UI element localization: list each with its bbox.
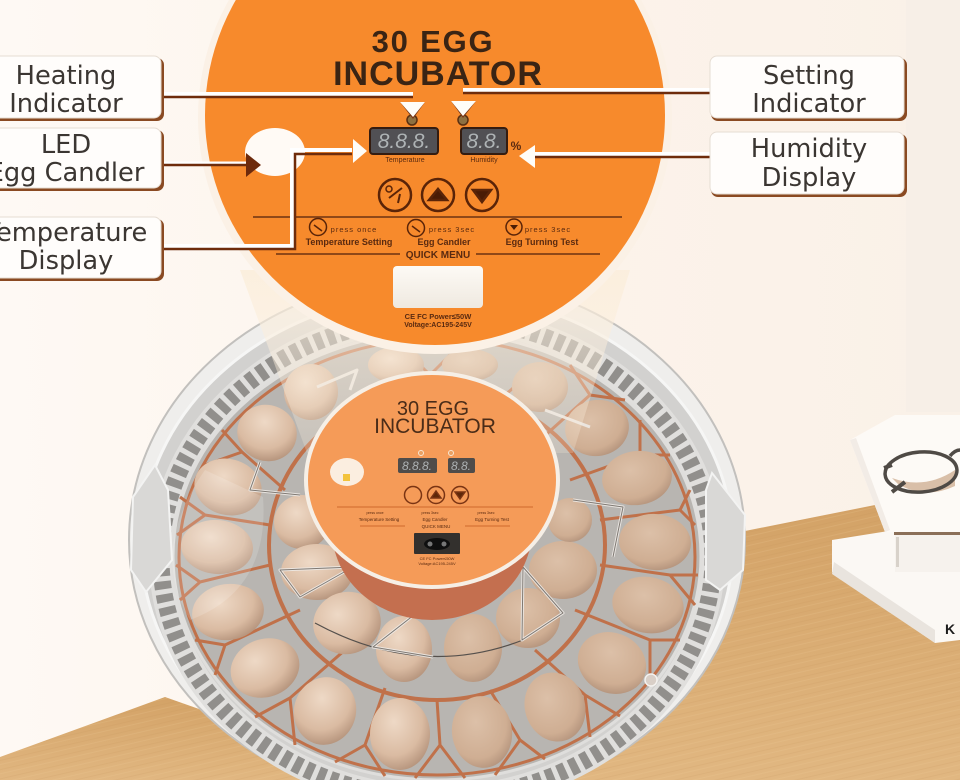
indicator lights	[407, 115, 468, 125]
upper book	[850, 415, 960, 535]
label: Heating Indicator: Indicator	[9, 89, 123, 119]
eggs	[179, 347, 432, 770]
lower book	[832, 530, 960, 643]
clear egg turners	[250, 370, 623, 657]
small buttons	[337, 486, 533, 526]
central column	[332, 440, 532, 620]
large panel title: 30 EGG	[372, 24, 494, 59]
book letter: K	[945, 621, 955, 637]
small panel title	[374, 398, 496, 438]
egg turner shading	[250, 462, 623, 657]
small quick menu text: Egg Candler	[422, 517, 448, 522]
humidity display	[461, 128, 522, 164]
outer rim	[129, 276, 745, 780]
small quick menu text: press 3sec	[478, 511, 495, 515]
small quick menu text: QUICK MENU	[422, 524, 450, 529]
label: Heating Indicator	[0, 56, 164, 121]
ventilation grille	[161, 318, 713, 780]
small displays: 8.8.8.	[402, 459, 432, 473]
glasses	[884, 450, 960, 494]
small quick menu text: press once	[366, 511, 384, 515]
callout leaders	[163, 90, 710, 249]
temperature display	[370, 128, 438, 164]
label: Setting Indicator: Setting	[763, 61, 855, 91]
small panel title: INCUBATOR	[374, 415, 496, 438]
large panel title	[333, 24, 543, 93]
white socket panel	[393, 266, 483, 308]
quick menu: press once	[331, 225, 377, 234]
small quick menu text: Egg Turning Test	[475, 517, 510, 522]
small displays: 8.8.	[451, 459, 471, 473]
small indicators	[418, 450, 454, 456]
label: Temperature Display: Display	[19, 246, 113, 276]
quick menu: QUICK MENU	[406, 250, 470, 261]
large panel title: INCUBATOR	[333, 55, 543, 93]
quick menu: Temperature Setting	[306, 237, 392, 247]
LED leader	[163, 153, 261, 177]
label: Humidity Display: Humidity	[751, 134, 867, 164]
quick menu: press 3sec	[525, 225, 571, 234]
label: Humidity Display: Display	[762, 163, 856, 193]
small certification text: CE FC Power≤50W	[420, 556, 455, 561]
buttons	[379, 179, 498, 211]
small displays	[398, 458, 475, 473]
certification text: Voltage:AC195-245V	[404, 322, 472, 329]
label: Temperature Display	[0, 217, 164, 281]
label: LED Egg Candler: LED	[41, 130, 91, 160]
quick menu: Egg Turning Test	[506, 237, 578, 247]
small certification text: Voltage:AC195-245V	[418, 561, 456, 566]
humidity display: 8.8.	[466, 130, 502, 153]
certification text	[404, 312, 472, 329]
orange tray frame	[176, 339, 698, 778]
quick menu	[253, 217, 622, 261]
temperature display: Temperature	[385, 157, 425, 164]
temperature leader	[163, 139, 367, 249]
LED candler window	[245, 128, 305, 176]
quick menu: press 3sec	[429, 225, 475, 234]
books and glasses	[832, 415, 960, 643]
label: Setting Indicator	[710, 56, 907, 121]
humidity leader	[519, 145, 710, 168]
temperature display: 8.8.8.	[378, 130, 430, 153]
power socket	[414, 533, 460, 554]
quick menu: Egg Candler	[417, 237, 471, 247]
small quick menu text	[359, 511, 510, 529]
small quick menu text: Temperature Setting	[359, 517, 400, 522]
certification text: CE FC Power≤50W	[405, 312, 472, 321]
label: LED Egg Candler	[0, 128, 164, 191]
handle latch	[645, 674, 657, 686]
projection beam	[240, 270, 630, 453]
label: Humidity Display	[710, 132, 907, 197]
label: Setting Indicator: Indicator	[752, 89, 866, 119]
wooden table	[0, 505, 960, 780]
clear lid overlay	[172, 470, 523, 656]
large control panel	[198, 0, 672, 354]
humidity display: %	[511, 139, 522, 153]
label: Heating Indicator: Heating	[16, 61, 116, 91]
incubator	[129, 276, 745, 780]
small panel title: 30 EGG	[397, 398, 469, 420]
small candler	[330, 458, 364, 486]
small control panel	[304, 371, 560, 589]
humidity display: Humidity	[470, 157, 498, 164]
small certification text	[418, 556, 456, 566]
heating leader	[163, 94, 425, 119]
small quick menu text: press 3sec	[422, 511, 439, 515]
tray floor	[173, 332, 701, 780]
side handles	[131, 465, 745, 592]
setting leader	[451, 90, 710, 118]
